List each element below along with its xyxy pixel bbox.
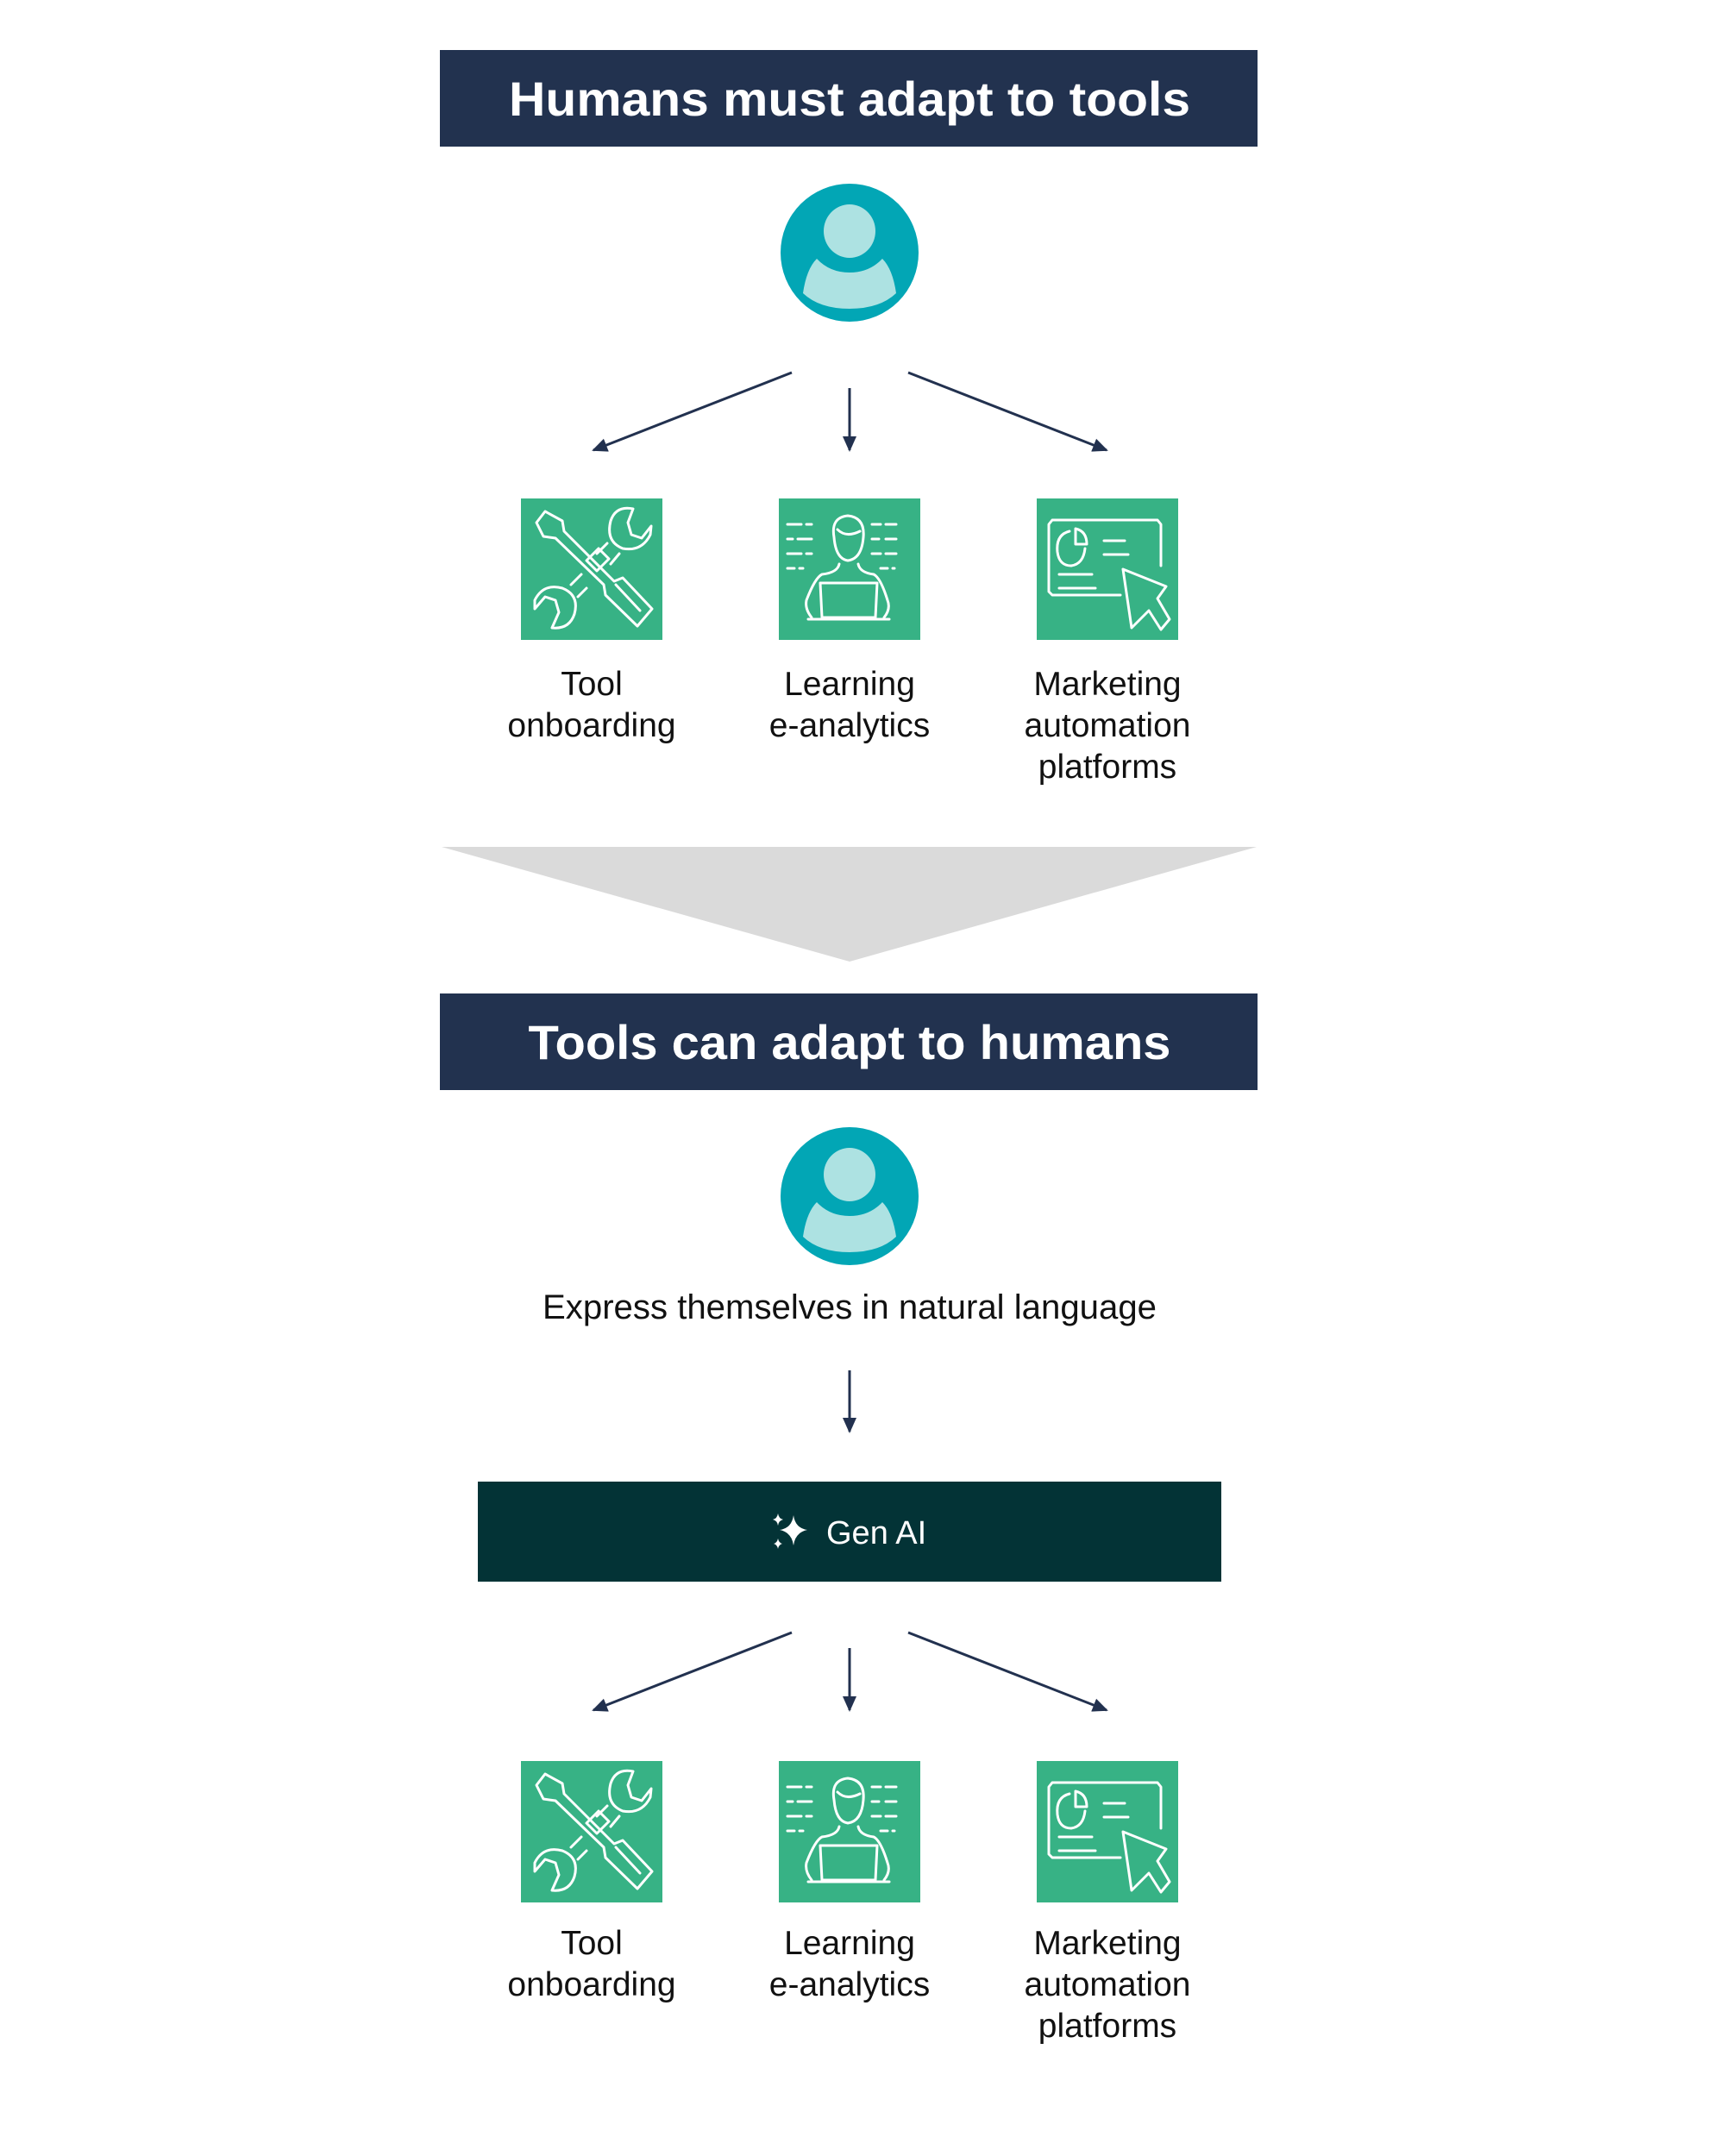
label: tool onboarding (bottom): onboarding bbox=[507, 1966, 676, 2003]
arrows: bottom fan bbox=[593, 1633, 1107, 1710]
title: humans must adapt to tools bbox=[440, 50, 1258, 147]
label: learning e-analytics (top): Learning bbox=[784, 666, 915, 703]
icon: marketing automation platforms (top) bbox=[1037, 498, 1178, 640]
icon: learning e-analytics (bottom) bbox=[779, 1761, 920, 1902]
icon: tool onboarding (top) bbox=[521, 498, 662, 640]
icon: tool onboarding (bottom) bbox=[521, 1761, 662, 1902]
title: tools can adapt to humans bbox=[440, 993, 1258, 1090]
label: marketing automation platforms (bottom): platforms bbox=[1038, 2008, 1176, 2045]
label: tool onboarding (top): onboarding bbox=[507, 707, 676, 744]
label: marketing automation platforms (top): automation bbox=[1025, 707, 1190, 744]
label: tool onboarding (bottom): Tool bbox=[561, 1925, 623, 1962]
label: marketing automation platforms (bottom): Marketing bbox=[1033, 1925, 1182, 1962]
icon: marketing automation platforms (bottom) bbox=[1037, 1761, 1178, 1902]
box: gen ai: Gen AI bbox=[826, 1515, 926, 1551]
icon: person top bbox=[781, 184, 919, 322]
label: marketing automation platforms (bottom): automation bbox=[1025, 1966, 1190, 2003]
text: express themselves in natural language: Express themselves in natural language bbox=[543, 1288, 1157, 1326]
label: marketing automation platforms (top): platforms bbox=[1038, 749, 1176, 786]
icon: person bottom bbox=[781, 1127, 919, 1265]
label: tool onboarding (top): Tool bbox=[561, 666, 623, 703]
label: marketing automation platforms (top): Marketing bbox=[1033, 666, 1182, 703]
icon: learning e-analytics (top) bbox=[779, 498, 920, 640]
label: learning e-analytics (top): e-analytics bbox=[769, 707, 930, 744]
arrows: top fan bbox=[593, 373, 1107, 450]
title: tools can adapt to humans: Tools can adapt to humans bbox=[528, 1015, 1171, 1069]
label: learning e-analytics (bottom): Learning bbox=[784, 1925, 915, 1962]
arrow: to gen ai bbox=[849, 1370, 850, 1432]
arrow: grey transition triangle bbox=[442, 847, 1257, 962]
title: humans must adapt to tools: Humans must adapt to tools bbox=[509, 72, 1190, 126]
label: learning e-analytics (bottom): e-analytics bbox=[769, 1966, 930, 2003]
box: gen ai bbox=[478, 1482, 1221, 1582]
